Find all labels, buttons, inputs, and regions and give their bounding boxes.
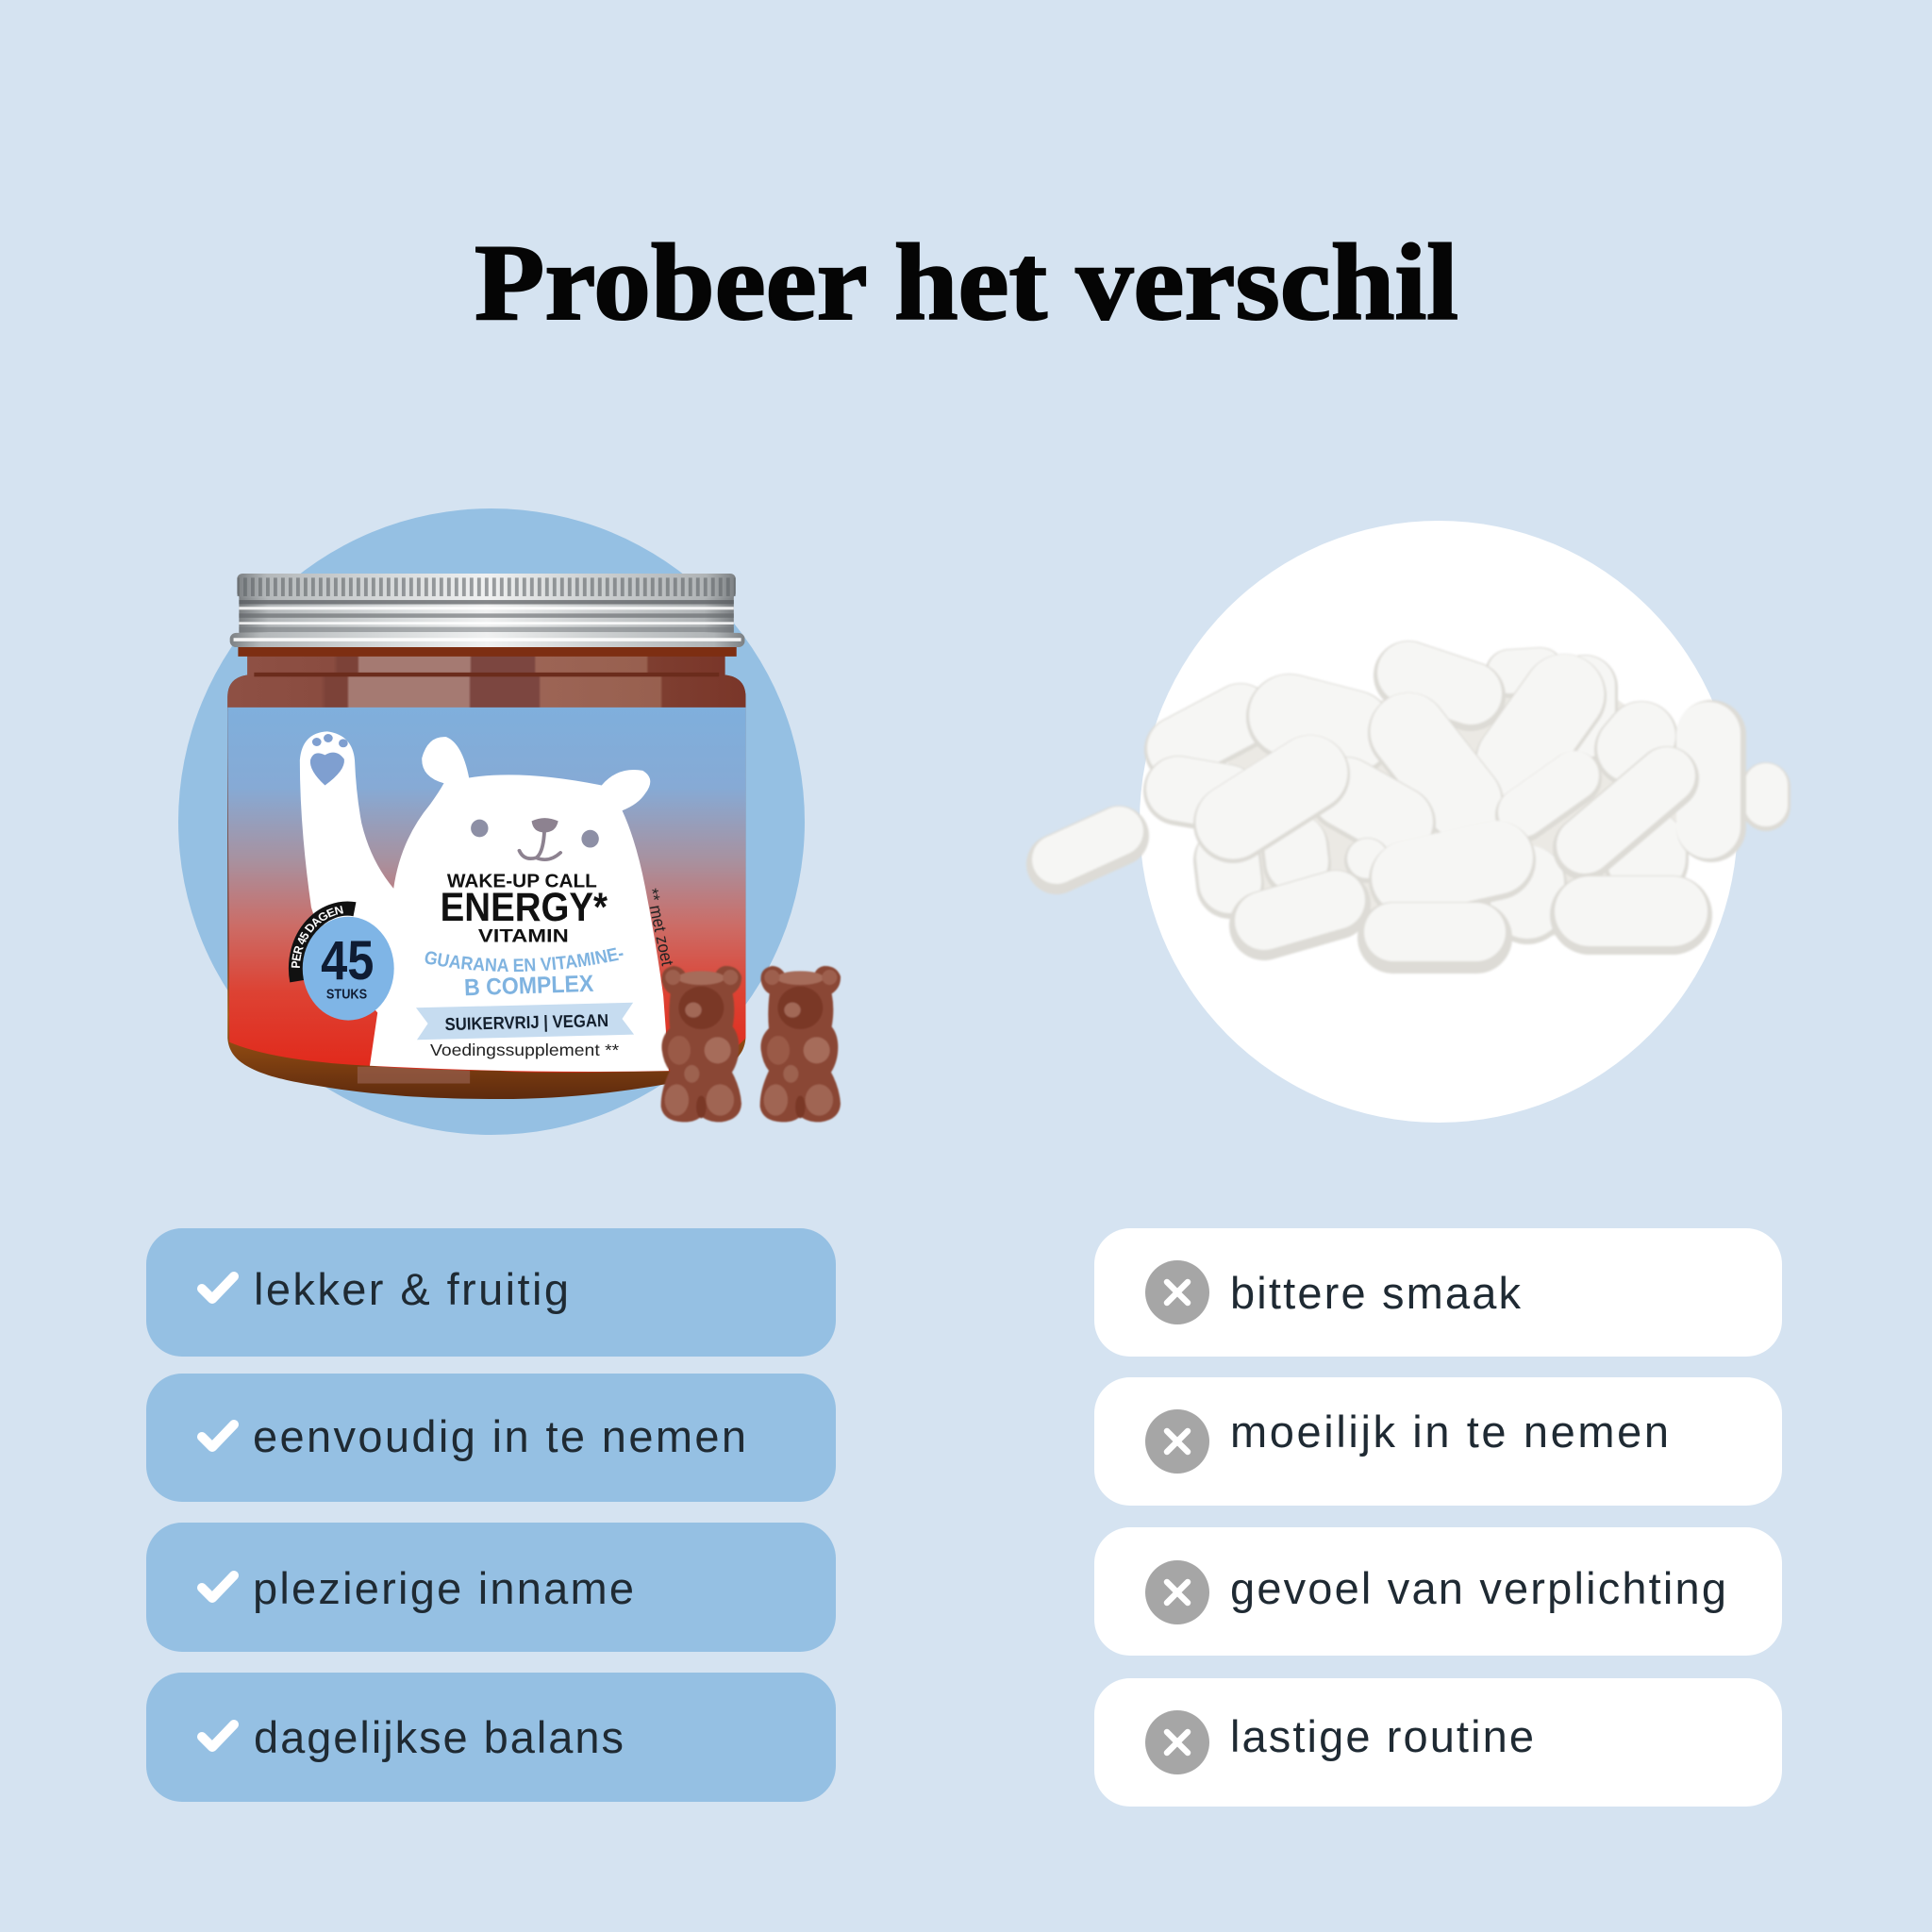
tablet pile (1178, 670, 1766, 948)
text: lekker & fruitig (254, 1264, 569, 1314)
icon: check (202, 1724, 234, 1747)
row: bittere (1094, 1228, 1782, 1357)
icon: cross (1145, 1710, 1209, 1774)
lid ribs (237, 577, 736, 596)
text: plezierige inname (253, 1563, 634, 1613)
supplement line: Voedingssupplement ** (430, 1041, 619, 1059)
badge unit: STUKS (326, 987, 367, 1002)
product name: VITAMIN (478, 925, 569, 946)
lid threads (239, 596, 734, 635)
product name (441, 870, 608, 946)
bear illustration (300, 731, 669, 1072)
blue circle backdrop (178, 508, 805, 1135)
icon: check (202, 1276, 234, 1299)
bear face (471, 818, 599, 859)
text: dagelijkse balans (254, 1712, 624, 1762)
panel: gummy product (178, 508, 841, 1135)
text: gevoel van verplichting (1230, 1563, 1726, 1613)
panel: tablets (1057, 521, 1766, 1123)
row: dagelijkse (146, 1673, 836, 1802)
banner text: SUIKERVRIJ | VEGAN (444, 1011, 608, 1035)
badge band (296, 908, 355, 981)
glass neck (238, 645, 737, 676)
icon: cross (1145, 1560, 1209, 1624)
count badge (289, 902, 394, 1021)
list: tablet drawbacks (1094, 1228, 1782, 1807)
ingredient line two: B COMPLEX (464, 970, 594, 1001)
list: gummy benefits (146, 1228, 836, 1802)
ingredient line: GUARANA EN VITAMINE- (425, 947, 624, 972)
badge circle (303, 917, 394, 1021)
row: moeilijk (1094, 1377, 1782, 1506)
glass shoulder (227, 675, 745, 711)
lid top band (237, 574, 736, 598)
claims banner (416, 1003, 634, 1040)
row: gevoel (1094, 1527, 1782, 1656)
row: lekker (146, 1228, 836, 1357)
row: lastige (1094, 1678, 1782, 1807)
white circle backdrop (1140, 521, 1738, 1123)
lone tablet (1057, 831, 1119, 864)
icon: cross (1145, 1260, 1209, 1324)
product jar (227, 574, 745, 1099)
badge band text: PER 45 DAGEN (291, 906, 343, 968)
side note: ** met zoet (642, 887, 677, 967)
text: eenvoudig in te nemen (253, 1411, 746, 1461)
icon: cross (1145, 1409, 1209, 1474)
paw pad (310, 734, 348, 785)
row: plezierige (146, 1523, 836, 1652)
lid (230, 574, 744, 647)
icon: check (202, 1424, 234, 1447)
text: bittere smaak (1230, 1268, 1521, 1318)
base reflection (358, 1067, 470, 1084)
product name: ENERGY* (441, 886, 608, 930)
badge number: 45 (321, 929, 374, 991)
lid rim (230, 633, 744, 647)
text: moeilijk in te nemen (1230, 1407, 1669, 1457)
row: eenvoudig (146, 1374, 836, 1502)
icon: check (202, 1575, 234, 1598)
text: lastige routine (1230, 1711, 1534, 1761)
bear body and arm (300, 731, 669, 1072)
gummy bear right (760, 966, 841, 1122)
title: Probeer het verschil (475, 223, 1458, 342)
gummy bears (661, 966, 841, 1122)
jar body (227, 675, 745, 1099)
product name: WAKE-UP CALL (447, 870, 597, 891)
jar label (227, 708, 745, 1073)
gummy bear left (661, 966, 741, 1122)
